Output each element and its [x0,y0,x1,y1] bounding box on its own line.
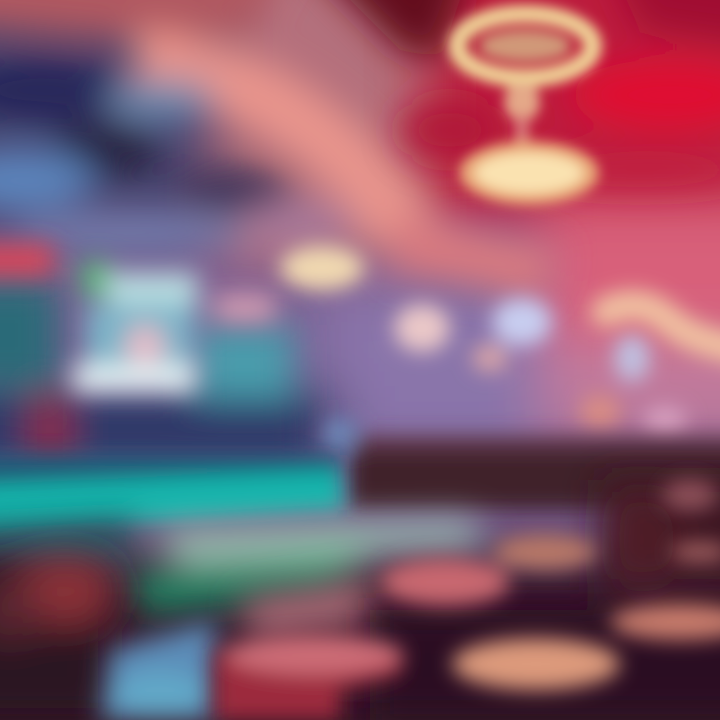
left wall screens [0,245,310,465]
teal gaming table [0,455,490,614]
dark bar counter [325,420,720,510]
neon sign on right wall [606,305,720,352]
foreground lounge tables [215,479,720,720]
foreground dark seats [0,556,380,720]
chandelier [457,14,599,205]
ceiling: salmon arch and navy panels [0,0,560,300]
top right: deep red ceiling [290,0,720,188]
hanging lamps [280,246,687,438]
